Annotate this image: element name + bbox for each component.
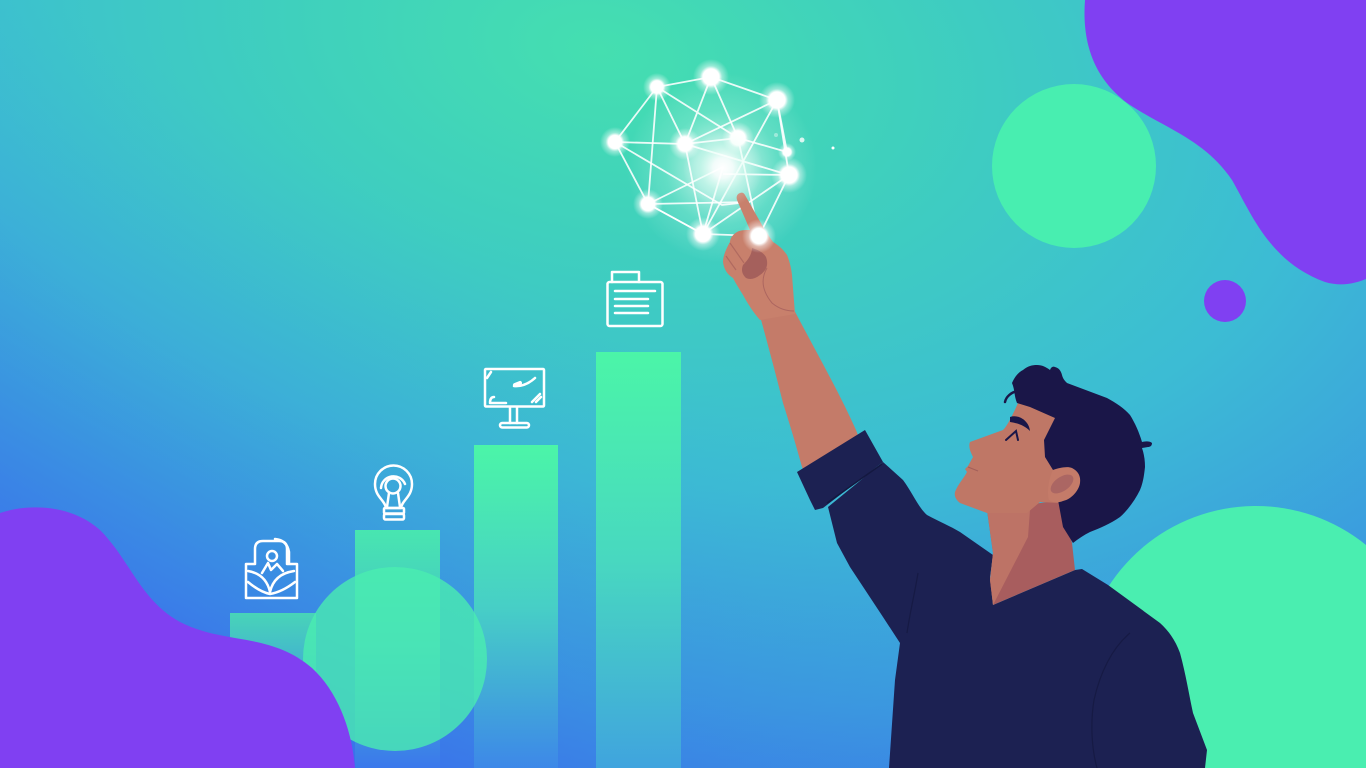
finger fold xyxy=(726,243,744,270)
central glow xyxy=(683,128,763,208)
purple blob top right xyxy=(1085,0,1366,284)
bar chart xyxy=(230,352,681,768)
bar 4 xyxy=(596,352,681,768)
icon: monitor xyxy=(485,369,544,428)
sleeve seam xyxy=(1092,633,1130,768)
mouth xyxy=(968,467,978,471)
purple blob bottom left xyxy=(0,507,355,768)
face xyxy=(955,402,1066,513)
icon: light bulb xyxy=(375,466,412,520)
hair xyxy=(1012,365,1152,543)
person xyxy=(723,193,1207,768)
neck highlight xyxy=(987,510,1030,605)
inner ear xyxy=(1047,471,1077,497)
icon: folder document xyxy=(608,272,662,326)
arm xyxy=(760,308,862,482)
eyebrow xyxy=(1010,416,1030,431)
network nodes xyxy=(600,59,807,253)
hand xyxy=(723,193,795,320)
small purple dot xyxy=(1204,280,1246,322)
translucent green circle over bars xyxy=(303,567,487,751)
network lines xyxy=(615,77,789,236)
green circle top right xyxy=(992,84,1156,248)
icon: person card xyxy=(246,539,297,598)
bar 1 xyxy=(230,613,316,768)
ear xyxy=(1048,467,1080,502)
eye xyxy=(1006,431,1018,440)
network glow xyxy=(627,73,817,263)
cuff seam xyxy=(827,464,882,503)
glowing network xyxy=(615,73,834,263)
green circle bottom right xyxy=(1081,506,1366,768)
hair strand xyxy=(1005,391,1018,402)
underarm fold xyxy=(907,573,918,633)
neck xyxy=(987,500,1075,605)
bar 2 xyxy=(355,530,440,768)
palm shadow xyxy=(742,248,767,279)
bar 3 xyxy=(474,445,558,768)
shirt and sleeve xyxy=(828,462,1207,768)
palm line xyxy=(763,268,794,311)
cuff xyxy=(797,430,883,510)
sparkles xyxy=(774,133,834,150)
